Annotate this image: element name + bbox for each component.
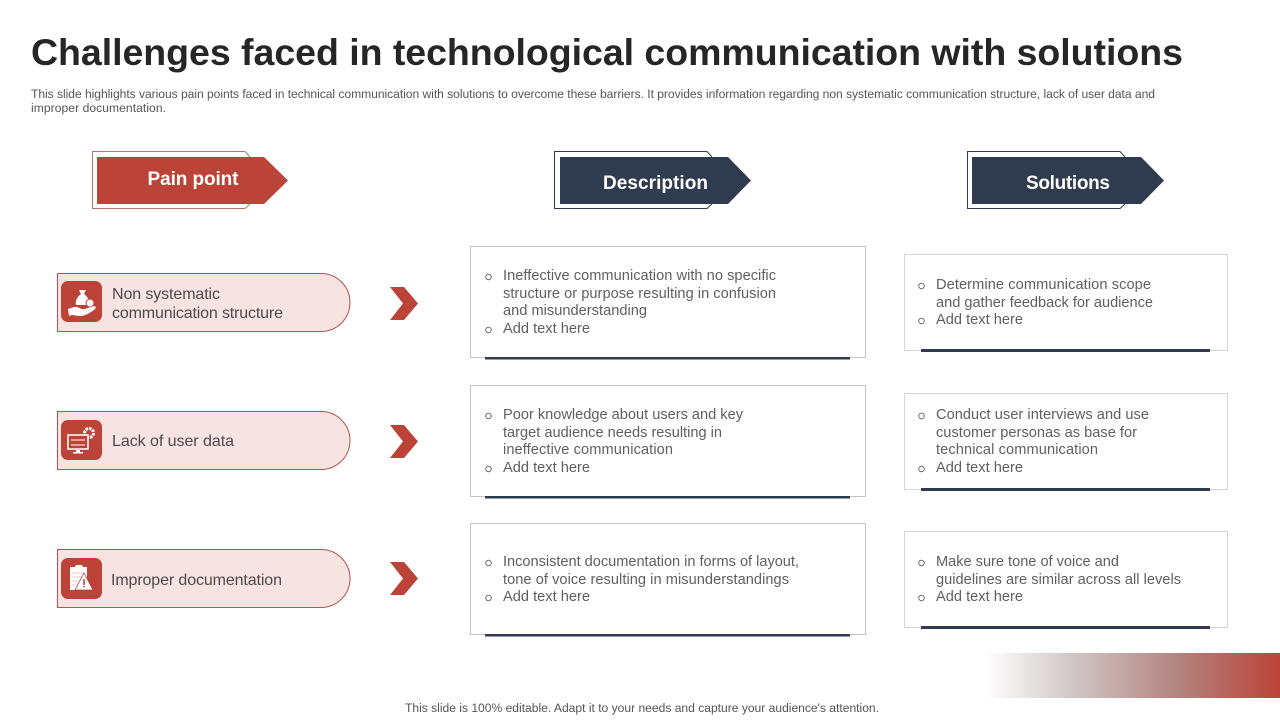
description card: row 2: ineffective communication <box>503 442 673 458</box>
solution card: row 2: customer personas as base for <box>936 425 1137 441</box>
pain point: Non systematic communication structure: Non systematic <box>112 286 220 303</box>
solution card: row 1 <box>904 254 1228 352</box>
pain point: Lack of user data <box>58 412 350 470</box>
icon: monitor with gear <box>61 420 102 460</box>
description card: row 3 <box>470 524 866 636</box>
solution card: row 1: Determine communication scope <box>936 277 1151 293</box>
column header: Solutions <box>968 152 1164 208</box>
column header: Pain point: Pain point <box>148 169 239 190</box>
arrow: row 2 chevron <box>390 425 418 458</box>
description card: row 3: Add text here <box>503 589 590 605</box>
subtitle text: This slide highlights various pain points faced in technical communication with solutions to overcome these barriers. It provides information regarding non systematic communication structure, lack of user data and <box>31 87 1155 101</box>
solution card: row 2: Conduct user interviews and use <box>936 407 1149 423</box>
solution card: row 2: Add text here <box>936 460 1023 476</box>
column header: Description <box>554 152 751 208</box>
solution card: row 1: and gather feedback for audience <box>936 295 1153 311</box>
column header: Solutions: Solutions <box>1026 173 1110 194</box>
subtitle text: improper documentation. <box>31 101 166 115</box>
solution card: row 2: technical communication <box>936 442 1098 458</box>
description card: row 3: tone of voice resulting in misunderstandings <box>503 572 789 588</box>
pain point: Improper documentation: Improper documentation <box>111 572 282 589</box>
description card: row 3: Inconsistent documentation in forms of layout, <box>503 554 799 570</box>
column header: Description: Description <box>603 173 708 194</box>
description card: row 2: target audience needs resulting in <box>503 425 722 441</box>
pain point: Improper documentation <box>58 550 350 608</box>
title: Challenges faced in technological communication with solutions <box>31 31 1183 73</box>
footer note: This slide is 100% editable. Adapt it to your needs and capture your audience's attention. <box>405 701 879 715</box>
description card: row 1: and misunderstanding <box>503 303 647 319</box>
solution card: row 3: Add text here <box>936 589 1023 605</box>
description card: row 2: Poor knowledge about users and key <box>503 407 744 423</box>
column header: Pain point <box>92 152 288 208</box>
subtitle text <box>31 87 1155 115</box>
description card: row 2: Add text here <box>503 460 590 476</box>
solution card: row 3 <box>904 532 1228 629</box>
pain point: Non systematic communication structure: communication structure <box>112 305 283 322</box>
icon: clipboard with warning <box>61 558 102 599</box>
gradient bar <box>985 653 1280 698</box>
pain point: Lack of user data: Lack of user data <box>112 433 234 450</box>
solution card: row 3: guidelines are similar across all levels <box>936 572 1181 588</box>
solution card: row 2 <box>904 394 1228 491</box>
solution card: row 3: Make sure tone of voice and <box>936 554 1119 570</box>
description card: row 1: Ineffective communication with no specific <box>503 268 776 284</box>
description card: row 1 <box>470 246 866 360</box>
description card: row 1: structure or purpose resulting in confusion <box>503 286 776 302</box>
description card: row 2 <box>470 386 866 498</box>
description card: row 1: Add text here <box>503 321 590 337</box>
arrow: row 1 chevron <box>390 287 418 320</box>
icon: hand holding money bag <box>61 281 102 322</box>
pain point: Non systematic communication structure <box>58 274 350 332</box>
arrow: row 3 chevron <box>390 562 418 595</box>
solution card: row 1: Add text here <box>936 312 1023 328</box>
